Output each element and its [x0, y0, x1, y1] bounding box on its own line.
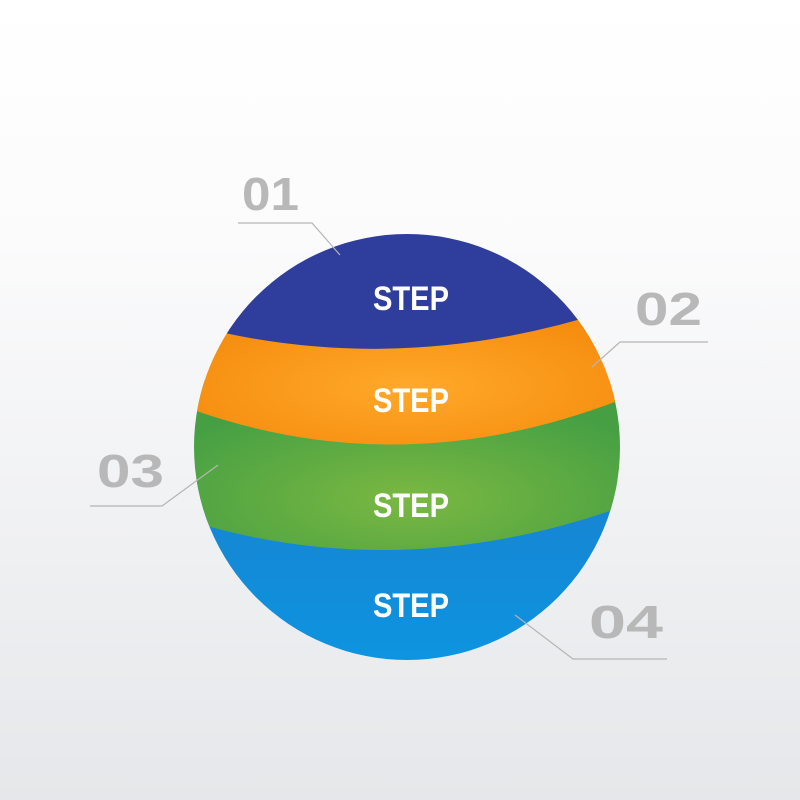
band: orange step 02 [180, 300, 640, 444]
number labels: 02 [635, 283, 702, 335]
number labels [97, 168, 702, 648]
step labels: STEP [373, 280, 449, 318]
step labels: STEP [373, 487, 449, 525]
number labels: 04 [589, 596, 664, 648]
sphere chart [194, 234, 620, 660]
step labels: STEP [373, 382, 449, 420]
band: green step 03 [180, 380, 640, 550]
step labels: STEP [373, 587, 449, 625]
band: blue step 04 [196, 480, 618, 660]
number labels: 03 [97, 445, 164, 497]
step labels [373, 280, 449, 625]
number labels: 01 [242, 168, 299, 220]
band: navy step 01 [226, 234, 578, 349]
leader lines [90, 223, 708, 659]
